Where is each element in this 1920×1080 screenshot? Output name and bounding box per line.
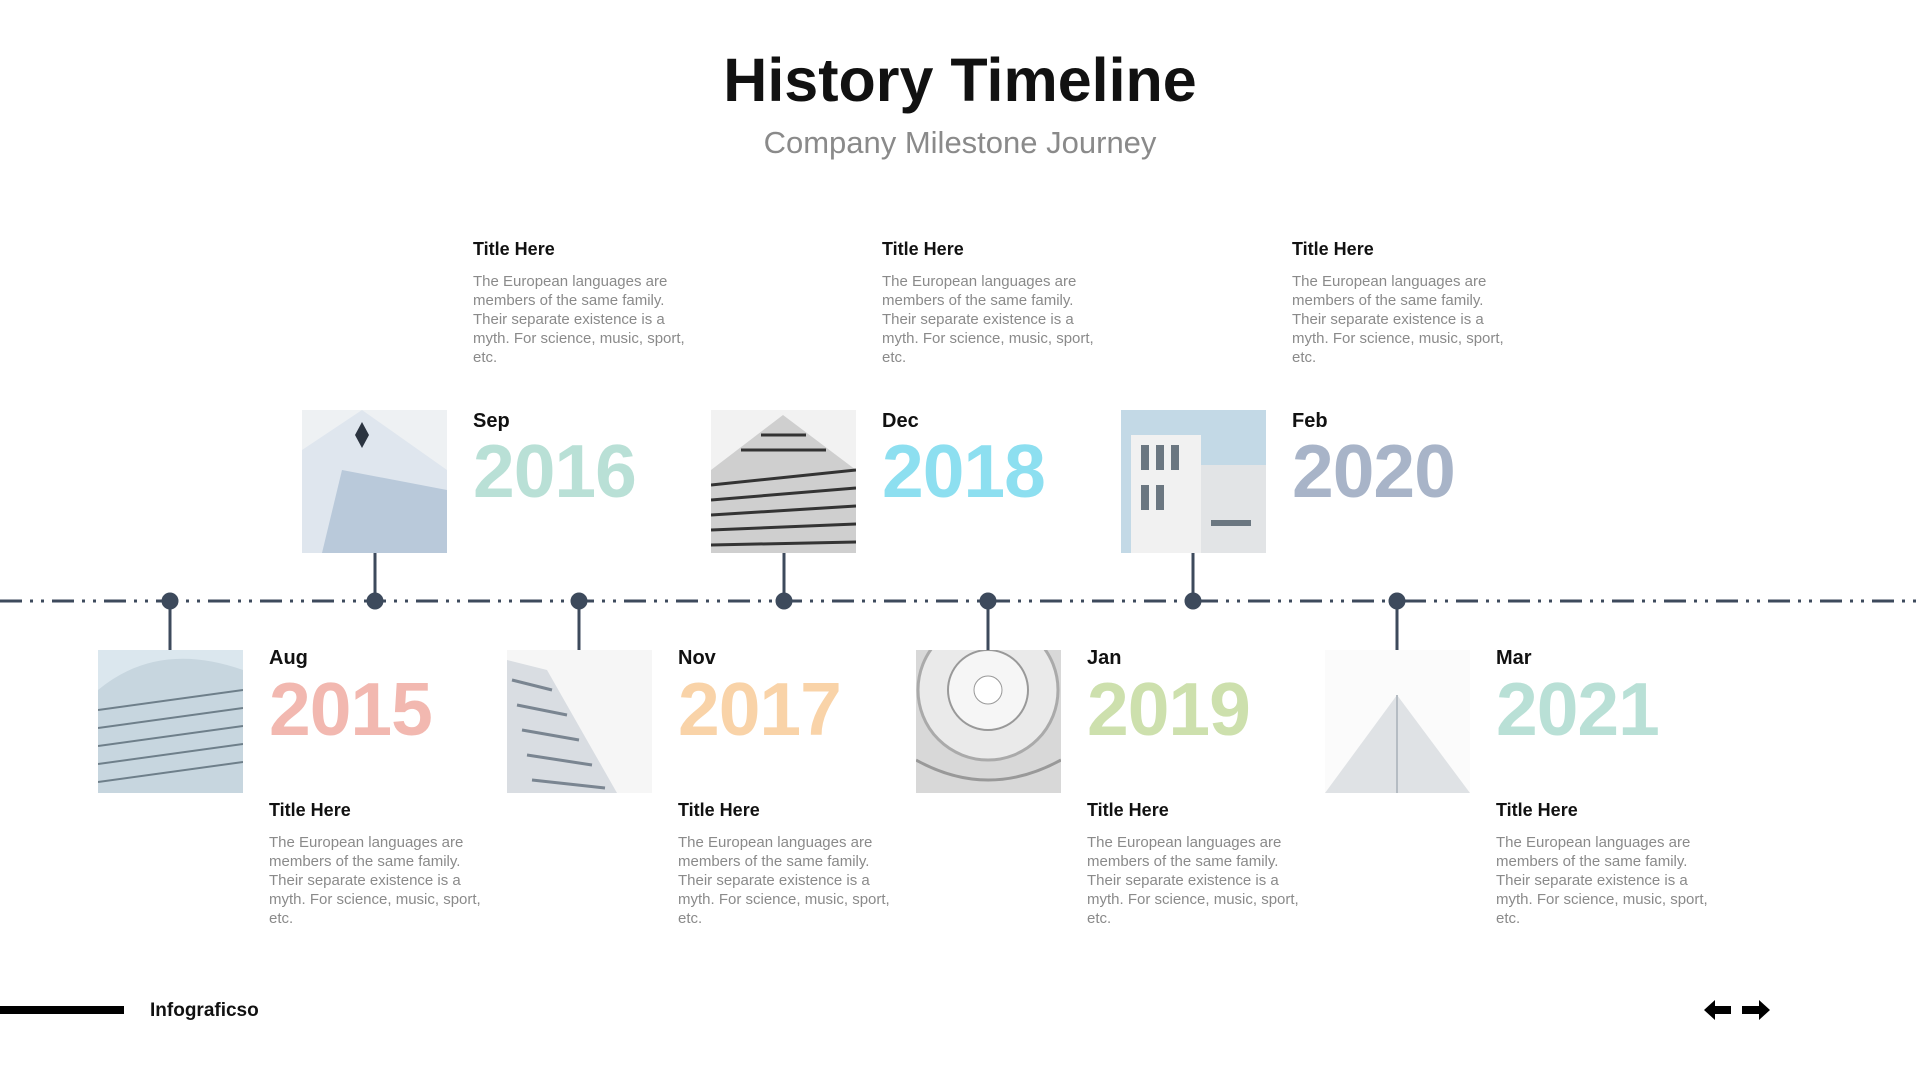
milestone 2015: Title Here: [269, 800, 351, 820]
milestone 2016: Title Here: [473, 239, 555, 259]
milestone 2019: Title Here: [1087, 800, 1169, 820]
milestone 2015: Aug: [269, 647, 308, 669]
footer brand: Infograficso: [150, 1000, 259, 1021]
milestone 2021: [1325, 647, 1708, 927]
milestone 2020: [1121, 239, 1504, 553]
milestone 2019: The European languages are members of the same family. Their separate existence is a myth. For science, music, sport, etc.: [1087, 834, 1299, 927]
milestone 2016: Sep: [473, 410, 510, 432]
milestone 2017: The European languages are members of the same family. Their separate existence is a myth. For science, music, sport, etc.: [678, 834, 890, 927]
title: History Timeline: [723, 46, 1197, 114]
milestone 2020: 2020: [1292, 429, 1455, 513]
milestone 2020: Title Here: [1292, 239, 1374, 259]
milestone 2021: 2021: [1496, 667, 1659, 751]
milestone 2020: The European languages are members of the same family. Their separate existence is a myth. For science, music, sport, etc.: [1292, 273, 1504, 366]
milestone 2021: Mar: [1496, 647, 1532, 669]
image: balcony building: [507, 650, 652, 793]
image: dome: [916, 650, 1061, 793]
icon: navigation arrows: [1704, 1000, 1770, 1020]
milestone 2021: The European languages are members of the same family. Their separate existence is a myth. For science, music, sport, etc.: [1496, 834, 1708, 927]
milestone 2017: Title Here: [678, 800, 760, 820]
milestone 2021: Title Here: [1496, 800, 1578, 820]
milestone 2018: [711, 239, 1094, 553]
subtitle: Company Milestone Journey: [764, 125, 1156, 160]
milestone 2016: [302, 239, 685, 553]
milestone 2019: 2019: [1087, 667, 1250, 751]
milestone 2017: Nov: [678, 647, 716, 669]
footer brand: [0, 1000, 259, 1021]
milestone 2015: 2015: [269, 667, 432, 751]
milestone 2018: Title Here: [882, 239, 964, 259]
image: striped building: [711, 410, 856, 553]
milestone 2019: Jan: [1087, 647, 1121, 669]
milestone 2020: Feb: [1292, 410, 1328, 432]
milestone 2015: The European languages are members of the same family. Their separate existence is a myth. For science, music, sport, etc.: [269, 834, 481, 927]
milestone 2019: [916, 647, 1299, 927]
timeline axis: [0, 553, 1916, 650]
milestone 2017: 2017: [678, 667, 841, 751]
milestone 2017: [507, 647, 890, 927]
milestone 2016: 2016: [473, 429, 636, 513]
milestone 2015: [98, 647, 481, 927]
milestone 2018: 2018: [882, 429, 1045, 513]
image: glass building: [302, 410, 447, 553]
milestone 2018: The European languages are members of the same family. Their separate existence is a myth. For science, music, sport, etc.: [882, 273, 1094, 366]
image: pyramid tower: [1325, 695, 1470, 793]
image: white cube building: [1121, 410, 1266, 553]
image: curved building: [98, 650, 243, 793]
milestone 2016: The European languages are members of the same family. Their separate existence is a myth. For science, music, sport, etc.: [473, 273, 685, 366]
milestone 2018: Dec: [882, 410, 919, 432]
